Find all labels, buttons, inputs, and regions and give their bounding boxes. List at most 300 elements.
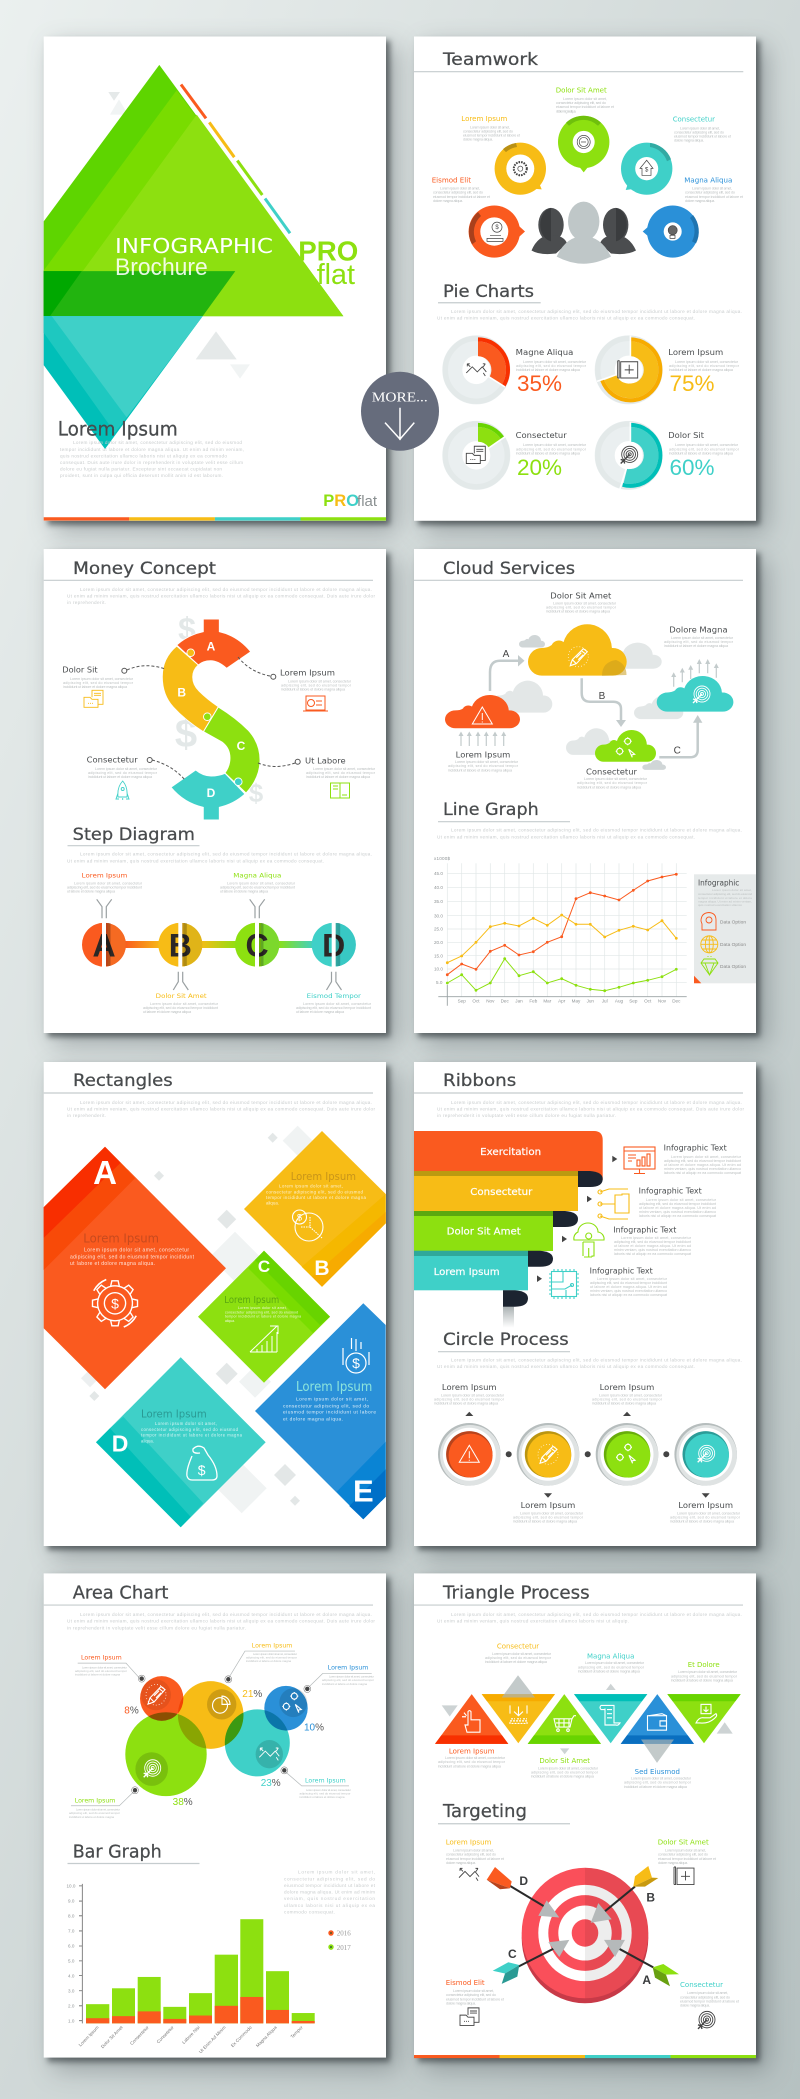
arrow D: D	[519, 1874, 528, 1888]
grey background clouds	[491, 635, 683, 770]
panel: triangle process and targeting page	[414, 1573, 756, 2058]
callout: teal: incididunt ut labore et dolore magna	[300, 1795, 345, 1799]
pie: 60 percent	[598, 422, 740, 489]
triangle label: lorem ipsum: adipiscing elit, sed do eiusmod tempor	[438, 1760, 506, 1764]
ribbon shadow	[503, 1307, 514, 1328]
diamond D: D	[112, 1431, 128, 1457]
triangle label: sed eiusmod: Sed Eiusmod	[635, 1768, 680, 1776]
label: consectetur	[673, 116, 731, 142]
step label: magna aliqua: Magna Aliqua	[233, 872, 281, 880]
triangle label: dolor sit amet: Lorem ipsum dolor sit amet, consectetur	[538, 1766, 599, 1770]
ribbon item 4: Lorem ipsum dolor sit amet, consectetur	[597, 1277, 668, 1281]
diamond E: consectetur adipiscing elit, sed do	[283, 1403, 369, 1409]
bubble: teal: $	[645, 167, 649, 173]
process label 2: Lorem ipsum dolor sit amet, consectetur	[520, 1512, 584, 1516]
cloud: green	[595, 730, 656, 762]
line chart: Mar	[543, 999, 552, 1004]
callout: orange	[225, 1642, 297, 1683]
triangle label: dolor sit amet	[531, 1757, 599, 1779]
cover title: Brochure	[115, 254, 208, 281]
callout: red: Lorem ipsum dolor sit amet, consectetur	[82, 1665, 127, 1669]
label: lorem ipsum: adipiscing elit, sed do eiusmod tempor	[448, 764, 519, 768]
dollar puzzle: A	[177, 619, 251, 668]
ribbons body text: in reprehenderit in voluptate velit esse cillum dolore eu fugiat nulla pariatur.	[437, 1113, 616, 1118]
series: orange	[447, 915, 676, 963]
diamond E: Lorem ipsum dolor sit amet,	[296, 1397, 368, 1403]
overlapping circles	[125, 1676, 308, 1796]
ribbon item 1	[624, 1144, 742, 1175]
bubble: red: $	[495, 225, 499, 231]
money concept body text	[67, 587, 375, 605]
cover body text: consequat. Duis aute irure dolor in reprehenderit in voluptate velit esse cillum	[60, 460, 243, 466]
connector and label: dolor sit: adipiscing elit, sed do eiusmod tempor	[63, 681, 134, 685]
bar chart: Ex Commodo	[230, 2024, 253, 2048]
bar chart: 4.0	[68, 1973, 75, 1978]
ribbon: dolor sit amet: Dolor Sit Amet	[447, 1226, 521, 1237]
bubble: red	[469, 205, 525, 258]
panel: money concept and step diagram page	[44, 549, 386, 1033]
diamond A: $	[111, 1296, 119, 1312]
triangle: blue up	[621, 1694, 694, 1744]
chart legend panel	[694, 874, 756, 983]
step label: dolor sit amet: ut labore et dolore magna aliqua	[143, 1010, 192, 1014]
bar chart: 9.0	[68, 1899, 75, 1904]
bar chart: 2.0	[68, 2003, 75, 2008]
chart legend panel: magna aliqua. Ut enim ad minim veniam,	[698, 900, 752, 904]
pro flat wordmark	[298, 235, 358, 290]
heading: bar graph: Bar Graph	[73, 1842, 162, 1862]
line chart: Sep	[629, 999, 638, 1004]
arrows A B C: B	[599, 691, 606, 702]
step diagram body text: Ut enim ad minim veniam, quis nostrud exercitation ullamco laboris nisi ut aliquip ex ea commodo consequat.	[67, 858, 324, 863]
dollar puzzle: D	[171, 770, 245, 820]
step label: dolor sit amet: Dolor Sit Amet	[156, 992, 207, 1000]
pie: 75 percent: Lorem Ipsum	[668, 348, 723, 357]
triangle label: consectetur: Lorem ipsum dolor sit amet, consectetur	[492, 1652, 552, 1656]
diamond A: A	[93, 1154, 117, 1191]
bar legend: 2017	[337, 1944, 351, 1952]
connector and label: lorem ipsum: incididunt ut labore et dolore magna aliqua	[281, 688, 346, 692]
connector and label: lorem ipsum: Lorem ipsum dolor sit amet, consectetur	[288, 680, 352, 684]
label: magna aliqua: consectetur adipiscing elit, sed do	[685, 191, 735, 195]
label: dolore magna	[664, 625, 734, 648]
ribbon item 4	[549, 1266, 668, 1299]
bar chart: Ut Enim Ad Minim	[198, 2025, 227, 2054]
bar chart: 1.0	[68, 2018, 75, 2023]
dollar puzzle: B	[162, 646, 218, 732]
area chart body text: Lorem ipsum dolor sit amet, consectetur adipiscing elit, sed do eiusmod tempor incididunt ut labore et dolore magna aliqua.	[80, 1612, 372, 1618]
arrows A B C: A	[503, 649, 510, 660]
target label: eismod elit: consectetur adipiscing elit, sed do	[446, 1993, 496, 1997]
cover title: INFOGRAPHIC	[115, 234, 273, 258]
ribbon item 4: minim veniam, quis nostrud exercitation ullamco	[590, 1289, 667, 1293]
triangle process body text: Lorem ipsum dolor sit amet, consectetur adipiscing elit, sed do eiusmod tempor incididunt ut labore et dolore magna aliqua.	[451, 1612, 742, 1618]
label: eismod elit	[432, 177, 490, 203]
pie: 20 percent: Lorem ipsum dolor sit amet, consectetur	[523, 443, 587, 447]
more badge: MORE...	[372, 389, 428, 405]
callout: green	[69, 1787, 138, 1819]
percent labels	[124, 1689, 324, 1808]
decorative dollar signs: $	[178, 611, 196, 647]
panel: ribbons and circle process page	[414, 1062, 756, 1546]
pie: 75 percent: adipiscing elit, sed do eiusmod tempor	[669, 364, 740, 368]
decorative dollar signs: $	[249, 778, 264, 808]
label: consectetur: eiusmod tempor incididunt ut labore et	[674, 134, 731, 138]
line chart: 45.0	[434, 871, 443, 876]
triangle: green down	[667, 1694, 741, 1743]
money concept body text: Lorem ipsum dolor sit amet, consectetur adipiscing elit, sed do eiusmod tempor incididunt ut labore et dolore magna aliqua.	[80, 587, 372, 592]
diamond A: Lorem ipsum dolor sit amet, consectetur	[84, 1248, 189, 1254]
label: eismod elit: Eismod Elit	[432, 177, 471, 185]
ribbon: consectetur: Consectetur	[470, 1187, 532, 1198]
connector and label: dolor sit: Dolor Sit	[62, 666, 98, 675]
pie: 20 percent	[445, 424, 587, 487]
panel: teamwork and pie charts page	[414, 37, 756, 521]
pro flat wordmark: PRO	[298, 235, 358, 266]
arrow C	[493, 1940, 569, 1984]
panel: cover page	[44, 37, 386, 521]
pie: 75 percent	[597, 336, 740, 401]
label: dolor sit amet: eiusmod tempor incididunt ut labore et	[556, 105, 614, 109]
step label: dolor sit amet: Lorem ipsum dolor sit amet, consectetur	[150, 1002, 219, 1006]
triangle label: sed eiusmod	[624, 1768, 692, 1789]
callout: green: Lorem ipsum dolor sit amet, consectetur	[76, 1808, 120, 1812]
triangle label: et dolore: incididunt ut labore et dolore magna aliqua	[671, 1678, 734, 1682]
connector and label: ut labore: Ut Labore	[305, 756, 346, 765]
step label: eismod tempor: Lorem ipsum dolor sit amet, consectetur	[303, 1002, 372, 1006]
label: consectetur: adipiscing elit, sed do eiusmod tempor	[577, 781, 648, 785]
line chart: Feb	[529, 999, 538, 1004]
pie: 75 percent: 75%	[670, 371, 714, 396]
percent labels: 38%	[173, 1797, 193, 1808]
target label: dolor sit amet	[658, 1839, 717, 1885]
ribbon item 4: laboris nisi ut aliquip ex ea commodo consequat	[590, 1293, 667, 1297]
pie charts body text: Ut enim ad minim veniam, quis nostrud exercitation ullamco laboris nisi ut aliquip ex ea commodo consequat.	[437, 315, 695, 321]
heading: triangle process: Triangle Process	[442, 1583, 590, 1604]
process label 4: Lorem Ipsum	[678, 1501, 733, 1510]
pie charts body text	[437, 309, 742, 321]
process label 1: Lorem ipsum dolor sit amet, consectetur	[441, 1394, 505, 1398]
step bars	[124, 941, 315, 948]
step D	[312, 922, 356, 967]
process label 2: incididunt ut labore et dolore magna aliqua	[513, 1520, 578, 1524]
label: consectetur: Lorem ipsum dolor sit amet, consectetur	[584, 777, 648, 781]
ribbons body text: Lorem ipsum dolor sit amet, consectetur adipiscing elit, sed do eiusmod tempor incididunt ut labore et dolore magna aliqua.	[451, 1100, 742, 1105]
label: magna aliqua: dolore magna aliqua.	[685, 199, 715, 203]
bar chart: Labore Nisi	[181, 2025, 201, 2045]
ribbon item 3: laboris nisi ut aliquip ex ea commodo consequat	[614, 1252, 691, 1256]
pro flat wordmark: flat	[317, 258, 355, 290]
circle icon: pie	[207, 1689, 236, 1720]
ribbon item 3: adipiscing elit, sed do eiusmod tempor incididunt	[614, 1240, 691, 1244]
diamond C	[198, 1251, 330, 1383]
label: lorem ipsum	[461, 115, 520, 141]
rectangles body text	[67, 1100, 375, 1118]
pie: 60 percent: Dolor Sit	[668, 431, 704, 440]
diamond D: tempor incididunt ut labore et dolore magna	[141, 1433, 243, 1438]
line chart: 40.0	[434, 885, 443, 890]
callout: orange: incididunt ut labore et dolore magna	[246, 1659, 291, 1663]
label: dolor sit amet: consectetur adipiscing elit, sed do	[556, 101, 606, 105]
pie: 35 percent: adipiscing elit, sed do eiusmod tempor	[516, 364, 587, 368]
ribbon item 3: ut labore et dolore magna aliqua. Ut enim ad	[614, 1244, 691, 1248]
callout: red: Lorem Ipsum	[81, 1655, 122, 1662]
connector and label: consectetur: incididunt ut labore et dolore magna aliqua	[88, 775, 153, 779]
pie: 20 percent: adipiscing elit, sed do eiusmod tempor	[516, 447, 587, 451]
panel: rectangles page	[44, 1062, 386, 1546]
line chart: Nov	[486, 999, 495, 1004]
callout: teal: Lorem ipsum dolor sit amet, consectetur	[306, 1788, 351, 1792]
label: dolore magna: incididunt ut labore et dolore magna aliqua	[664, 644, 729, 648]
label: lorem ipsum: incididunt ut labore et dolore magna aliqua	[448, 768, 513, 772]
target label: lorem ipsum: dolore magna aliqua.	[446, 1861, 476, 1865]
target label: dolor sit amet: Lorem ipsum dolor sit amet,	[665, 1848, 706, 1853]
dollar puzzle: B: B	[177, 686, 186, 700]
line chart	[434, 856, 687, 1006]
label: dolor sit amet: Dolor Sit Amet	[556, 87, 607, 95]
connector and label: lorem ipsum: adipiscing elit, sed do eiusmod tempor	[281, 684, 352, 688]
connector and label: consectetur: Lorem ipsum dolor sit amet, consectetur	[95, 767, 158, 771]
target label: eismod elit: eiusmod tempor incididunt ut labore et	[446, 1997, 505, 2001]
process label 2: Lorem Ipsum	[521, 1501, 575, 1510]
connector and label: consectetur: Consectetur	[87, 756, 139, 765]
step C: C	[245, 928, 269, 964]
label: consectetur: consectetur adipiscing elit, sed do	[674, 130, 724, 134]
line chart: Jul	[602, 999, 608, 1004]
target label: eismod elit: Lorem ipsum dolor sit amet,	[453, 1989, 494, 1993]
callout: blue: incididunt ut labore et dolore magna	[322, 1682, 367, 1686]
line chart: x1000$	[434, 856, 450, 861]
process dots	[506, 1451, 669, 1457]
diamond B: consectetur adipiscing elit, sed do eiusmod	[266, 1189, 364, 1194]
ribbon: lorem ipsum: Lorem Ipsum	[434, 1267, 500, 1278]
label: eismod elit: eiusmod tempor incididunt ut labore et	[433, 195, 490, 199]
circle icon: nodes	[279, 1688, 307, 1717]
ribbon item 3: Infographic Text	[613, 1225, 676, 1234]
process label 2: adipiscing elit, sed do eiusmod tempor	[513, 1516, 584, 1520]
label: lorem ipsum: consectetur adipiscing elit, sed do	[463, 129, 513, 133]
line chart: 10.0	[434, 967, 443, 972]
process label 3: Lorem ipsum dolor sit amet, consectetur	[599, 1394, 663, 1398]
connector and label: lorem ipsum: Lorem Ipsum	[280, 669, 335, 678]
bar chart: Lorem Ipsum	[78, 2025, 100, 2048]
connector and label: ut labore: adipiscing elit, sed do eiusmod tempor	[306, 771, 376, 775]
target label: dolor sit amet: consectetur adipiscing elit, sed do	[658, 1853, 708, 1857]
triangle label: magna aliqua: incididunt ut labore et dolore magna aliqua	[578, 1669, 641, 1673]
line chart: 30.0	[434, 913, 443, 918]
up arrows under red cloud	[458, 732, 506, 746]
arrow B	[591, 1866, 658, 1923]
connector and label: dolor sit: Lorem ipsum dolor sit amet, consectetur	[70, 677, 134, 681]
diamond C: consectetur adipiscing elit, sed do eiusmod	[225, 1310, 298, 1314]
diamond D: Lorem Ipsum	[141, 1408, 207, 1421]
label: dolore magna: Lorem ipsum dolor sit amet, consectetur	[671, 636, 734, 640]
label: dolore magna: adipiscing elit, sed do eiusmod tempor	[664, 640, 734, 644]
callout: green: Lorem Ipsum	[75, 1798, 115, 1805]
callout: blue: Lorem Ipsum	[328, 1665, 368, 1672]
heading: targeting: Targeting	[442, 1802, 527, 1822]
label: consectetur: incididunt ut labore et dolore magna aliqua	[577, 786, 642, 790]
arrow A	[604, 1940, 679, 1987]
heading: step diagram: Step Diagram	[73, 825, 195, 845]
label: dolor sit amet: Dolor Sit Amet	[550, 591, 611, 600]
process label 4: adipiscing elit, sed do eiusmod tempor	[670, 1516, 741, 1520]
target label: consectetur: Consectetur	[680, 1981, 723, 1989]
line graph body text: Ut enim ad minim veniam, quis nostrud exercitation ullamco laboris nisi ut aliquip ex ea commodo consequat.	[437, 834, 695, 839]
heading: cloud services: Cloud Services	[443, 559, 575, 579]
process circle: green	[596, 1423, 658, 1486]
circle process body text: Ut enim ad minim veniam, quis nostrud exercitation ullamco laboris nisi ut aliquip ex ea commodo consequat.	[437, 1364, 695, 1369]
teal triangle	[44, 316, 203, 449]
diamond A: Lorem Ipsum	[83, 1230, 159, 1245]
small logo: PROflat	[323, 491, 378, 510]
bottom colour bar	[44, 517, 386, 521]
bar chart: 3.0	[68, 1988, 75, 1993]
bar graph text: commodo consequat.	[284, 1910, 335, 1916]
target label: consectetur: Lorem ipsum dolor sit amet,	[687, 1991, 728, 1995]
step label: dolor sit amet: adipiscing elit, sed do eiusmod tempor incididunt	[143, 1006, 218, 1010]
bar chart: Magna Aliqua	[255, 2024, 278, 2048]
heading: rectangles: Rectangles	[73, 1071, 173, 1091]
target label: eismod elit	[446, 1979, 505, 2025]
bar graph text: dolore magna aliqua. Ut enim ad minim	[284, 1889, 375, 1895]
diamond A	[44, 1147, 226, 1389]
bubble: green	[558, 116, 609, 172]
target label: consectetur: eiusmod tempor incididunt ut labore et	[680, 1999, 740, 2003]
step diagram body text: Lorem ipsum dolor sit amet, consectetur adipiscing elit, sed do eiusmod tempor incididunt ut labore et dolore magna aliqua.	[80, 852, 372, 857]
target label: lorem ipsum: consectetur adipiscing elit, sed do	[446, 1853, 496, 1857]
callout: orange: adipiscing elit, sed do eiusmod tempor	[246, 1655, 297, 1660]
ribbon item 2: Lorem ipsum dolor sit amet, consectetur	[646, 1198, 717, 1202]
bar chart	[66, 1883, 315, 2054]
pie: 35 percent: Magne Aliqua	[516, 348, 573, 357]
bar graph text: eiusmod tempor incididunt ut labore et	[284, 1883, 376, 1889]
ribbon item 4: ut labore et dolore magna aliqua. Ut enim ad	[590, 1285, 667, 1289]
triangle: teal down	[574, 1694, 647, 1743]
triangle label: magna aliqua: adipiscing elit, sed do eiusmod tempor	[578, 1665, 645, 1669]
label: lorem ipsum: Lorem ipsum dolor sit amet,	[470, 125, 510, 129]
bar chart: Tempor	[290, 2024, 304, 2039]
target label: consectetur: dolore magna aliqua.	[680, 2003, 710, 2008]
arrow B: B	[646, 1890, 655, 1904]
target label: eismod elit: dolore magna aliqua.	[446, 2001, 476, 2005]
pie: 75 percent: incididunt ut labore et dolore magna aliqua	[669, 368, 734, 372]
label: lorem ipsum: Lorem Ipsum	[461, 115, 507, 123]
ribbon item 2: Infographic Text	[639, 1187, 702, 1196]
callout: teal	[281, 1767, 351, 1799]
cover body text: Lorem ipsum dolor sit amet, consectetur adipiscing elit, sed do eiusmod	[73, 440, 242, 446]
target label: eismod elit: Eismod Elit	[446, 1979, 485, 1987]
chart legend panel: Data Option	[720, 964, 746, 970]
arrows A B C	[490, 649, 702, 757]
line chart: Apr	[558, 999, 566, 1004]
bar graph text: consectetur adipiscing elit, sed do	[284, 1876, 375, 1882]
step label: magna aliqua: Lorem ipsum dolor sit amet, consectetur	[227, 882, 296, 886]
ribbon item 2: adipiscing elit, sed do eiusmod tempor incididunt	[639, 1202, 716, 1206]
line chart: Oct	[644, 999, 652, 1004]
triangle label: sed eiusmod: adipiscing elit, sed do eiusmod tempor	[624, 1780, 692, 1784]
diamond A: adipiscing elit, sed do eiusmod tempor incididunt	[70, 1254, 195, 1260]
percent labels: 21%	[242, 1689, 262, 1700]
money concept body text: in reprehenderit.	[67, 600, 106, 605]
panel: cloud services and line graph page	[414, 549, 756, 1033]
process label 1: incididunt ut labore et dolore magna aliqua	[434, 1402, 499, 1406]
panel: area chart and bar graph page	[44, 1573, 386, 2058]
line chart: Oct	[472, 999, 480, 1004]
heading: area chart: Area Chart	[73, 1583, 169, 1604]
diamond C: C	[258, 1257, 270, 1276]
line chart: 35.0	[434, 899, 443, 904]
bubble: teal	[621, 143, 672, 195]
step label: eismod tempor: Eismod Tempor	[307, 992, 361, 1000]
cover title	[115, 234, 273, 281]
dollar puzzle: C	[204, 707, 260, 793]
target label: lorem ipsum: eiusmod tempor incididunt ut labore et	[446, 1857, 505, 1861]
triangle process body text	[437, 1612, 742, 1625]
team silhouettes	[532, 202, 636, 264]
arrow C: C	[508, 1947, 517, 1961]
pie: 35 percent	[445, 338, 587, 401]
diamond D: $	[198, 1462, 206, 1478]
dollar puzzle: D: D	[207, 786, 216, 800]
step label: dolor sit amet	[143, 992, 219, 1014]
connector and label: consectetur	[87, 756, 185, 800]
triangle label: consectetur	[485, 1643, 552, 1664]
triangle label: lorem ipsum	[438, 1747, 506, 1768]
step label: eismod tempor: ut labore et dolore magna aliqua	[296, 1010, 345, 1014]
circle icon: pencil	[141, 1679, 171, 1710]
label: lorem ipsum	[448, 750, 519, 772]
callout: orange: Lorem Ipsum	[252, 1642, 292, 1649]
ribbon item 3	[574, 1223, 692, 1257]
target label: consectetur: consectetur adipiscing elit, sed do	[680, 1995, 730, 1999]
callout: teal: adipiscing elit, sed do eiusmod tempor	[300, 1792, 350, 1796]
rectangles body text: in reprehenderit.	[67, 1113, 106, 1118]
cover heading: Lorem Ipsum	[58, 417, 178, 440]
diamond B: $	[297, 1212, 302, 1222]
rectangles body text: Ut enim ad minim veniam, quis nostrud exercitation ullamco laboris nisi ut aliquip ex ea commodo consequat. Duis aute irure dolor	[67, 1106, 375, 1111]
ribbon item 1: adipiscing elit, sed do eiusmod tempor incididunt	[664, 1159, 741, 1163]
step A	[82, 922, 126, 967]
connector and label: ut labore: Lorem ipsum dolor sit amet, consectetur	[313, 767, 376, 771]
callout: green: incididunt ut labore et dolore magna	[69, 1815, 114, 1819]
heading: money concept: Money Concept	[73, 559, 216, 579]
process label 4: Lorem ipsum dolor sit amet, consectetur	[677, 1512, 741, 1516]
diamond D	[96, 1357, 266, 1527]
decorative diamonds	[81, 1126, 313, 1513]
label: consectetur: Consectetur	[586, 767, 638, 776]
target label: lorem ipsum: Lorem ipsum dolor sit amet,	[453, 1848, 494, 1853]
process label 3: incididunt ut labore et dolore magna aliqua	[592, 1402, 657, 1406]
line graph body text	[437, 828, 742, 839]
bar graph text: ullamco laboris nisi ut aliquip ex ea	[284, 1903, 375, 1909]
decorative triangles upper	[108, 92, 128, 115]
triangle label: magna aliqua	[578, 1653, 645, 1673]
target label: lorem ipsum	[446, 1839, 505, 1881]
circle icon: chart	[256, 1740, 283, 1768]
circle icon: target	[135, 1752, 168, 1786]
diamond D: consectetur adipiscing elit, sed do eiusmod	[141, 1427, 239, 1432]
label: consectetur: Lorem ipsum dolor sit amet,	[680, 126, 720, 130]
diamond D: Lorem ipsum dolor sit amet,	[155, 1421, 217, 1426]
diamond D: aliqua.	[141, 1438, 154, 1443]
line chart: Jan	[515, 999, 523, 1004]
cover body text: quis nostrud exercitation ullamco laboris nisi ut aliquip ex ea commodo	[60, 453, 227, 459]
label: dolore magna: Dolore Magna	[669, 625, 728, 634]
bar chart: 8.0	[68, 1913, 75, 1918]
series: red	[447, 874, 676, 975]
ribbon item 3: Lorem ipsum dolor sit amet, consectetur	[621, 1236, 692, 1240]
